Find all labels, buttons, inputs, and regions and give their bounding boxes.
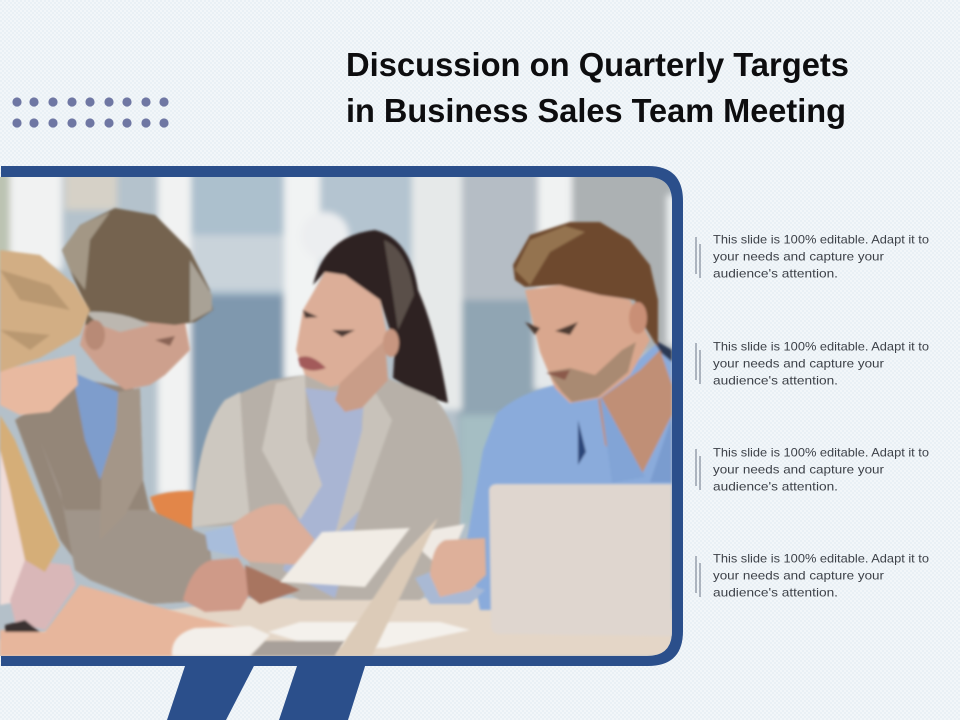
slanted bars under frame [167, 660, 367, 720]
orange chair [150, 491, 194, 535]
dot grid decoration [12, 97, 169, 128]
text block 3 [696, 446, 929, 494]
table [0, 598, 672, 656]
text block 1: This slide is 100% editable. Adapt it to [713, 232, 929, 246]
laptops [335, 484, 672, 656]
title: in Business Sales Team Meeting [346, 92, 846, 129]
window background [0, 170, 677, 525]
title [346, 46, 849, 129]
person: woman in centre [193, 230, 462, 600]
text block 4: This slide is 100% editable. Adapt it to [713, 552, 929, 566]
text block 1: your needs and capture your [713, 250, 884, 264]
text block 3: audience's attention. [713, 480, 838, 494]
text block 1: audience's attention. [713, 266, 838, 280]
person: blonde woman [0, 249, 234, 656]
text block 3: your needs and capture your [713, 462, 884, 476]
papers and hand [172, 524, 486, 656]
text block 2: your needs and capture your [713, 356, 884, 370]
text block 2: audience's attention. [713, 374, 838, 388]
photo: business team meeting [0, 170, 677, 656]
person: older man [15, 208, 315, 612]
text block 2: This slide is 100% editable. Adapt it to [713, 340, 929, 354]
title: Discussion on Quarterly Targets [346, 46, 849, 83]
text block 1 [696, 232, 929, 280]
text block 4: your needs and capture your [713, 568, 884, 582]
text block 4: audience's attention. [713, 586, 838, 600]
photo frame [1, 166, 683, 666]
text block 2 [696, 340, 929, 388]
person: young man [467, 222, 672, 610]
text block 4 [696, 552, 929, 600]
text block 3: This slide is 100% editable. Adapt it to [713, 446, 929, 460]
